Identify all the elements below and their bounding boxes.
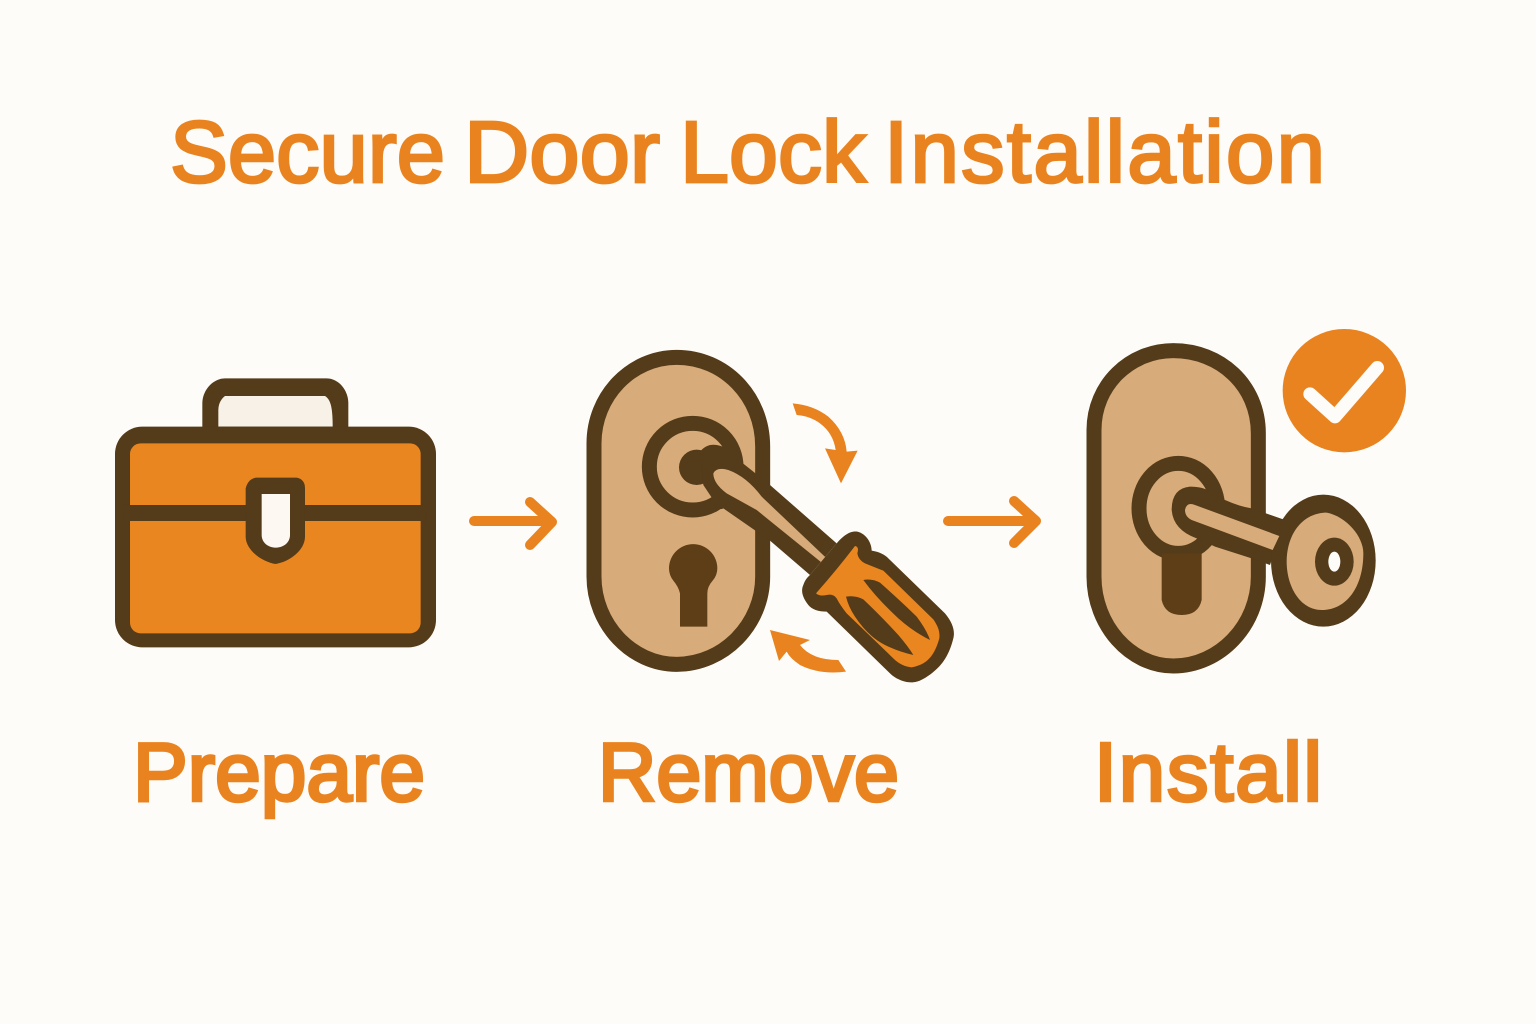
case body [115,427,436,647]
screwdriver [679,445,954,682]
icon: lock plate with screwdriver (Remove) [594,357,954,682]
label: Install: Install [1094,726,1322,818]
label: Remove: Remove [598,726,899,818]
title: Lock [680,104,866,201]
icon: lock plate with key (Install) [1094,329,1406,666]
keyhole slot [1162,553,1202,615]
title: Installation [884,104,1325,201]
label: Prepare: Prepare [133,726,425,818]
arrow: prepare to remove [474,502,552,545]
lock ring [649,423,736,510]
latch [246,478,305,564]
arrow: rotate clockwise bottom [770,630,846,672]
key [1172,487,1376,627]
handle [202,378,348,432]
keyhole [669,544,717,627]
lock plate [594,357,763,664]
title: Door [464,104,660,201]
title [170,104,1325,201]
arrow: remove to install [948,501,1036,543]
arrow: rotate clockwise top [793,403,858,483]
icon: check badge [1283,329,1406,452]
lock ring [1139,463,1218,553]
band [123,505,427,521]
title: Secure [170,104,445,201]
icon: toolbox (Prepare) [115,378,436,647]
lock plate [1094,351,1258,666]
